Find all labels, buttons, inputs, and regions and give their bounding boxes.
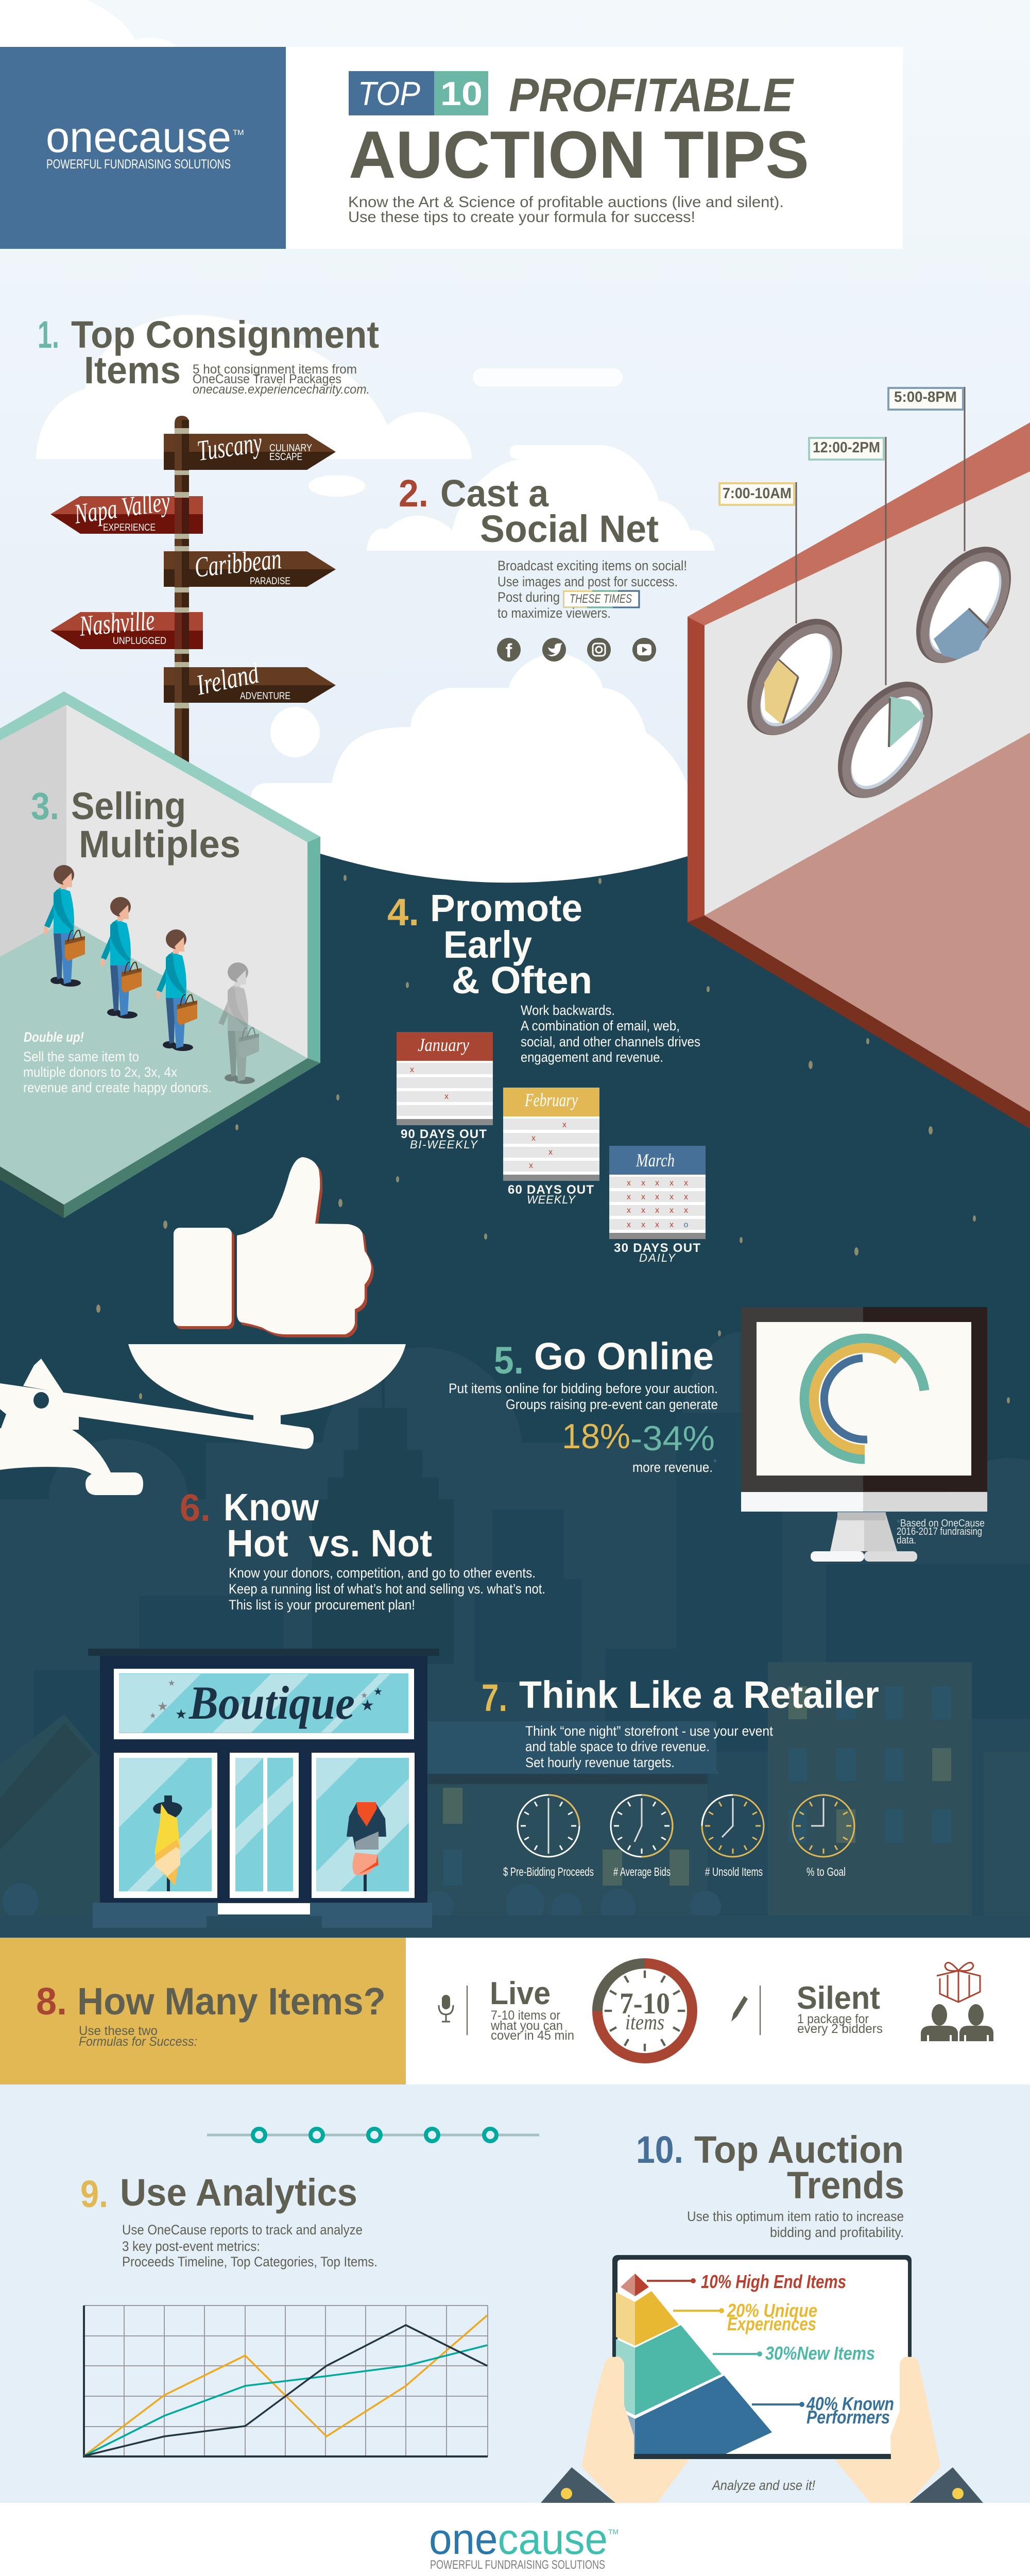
- calendar: february: 60 DAYS OUT: [508, 1183, 594, 1197]
- header panel: title: Know the Art & Science of profitable auctions (live and silent).: [348, 194, 784, 211]
- heading 4: promote early and often: Early: [443, 923, 532, 966]
- heading 5: go online: 5.: [494, 1339, 524, 1382]
- signpost: PARADISE: [250, 576, 290, 587]
- text block: one night storefront: and table space to drive revenue.: [525, 1739, 710, 1754]
- text block: silent: Silent: [797, 1980, 880, 2016]
- text block: silent: 1 package for: [797, 2012, 869, 2026]
- clouds: [0, 0, 715, 907]
- time label: 5-8pm with clock: 5:00-8PM: [894, 389, 957, 405]
- tablet with pyramid chart: 30%New Items: [765, 2343, 875, 2364]
- calendar: january: x: [410, 1065, 414, 1074]
- calendar: march: DAILY: [639, 1251, 676, 1264]
- panel: how many items heading: Use these two: [79, 2024, 158, 2038]
- calendar: january: [397, 1032, 493, 1151]
- text block: go online stat: *: [713, 1458, 717, 1468]
- icon: monitor with ring chart: [741, 1307, 987, 1562]
- illustration: boutique storefront: ★: [360, 1697, 374, 1714]
- text block: social tip: Use images and post for success.: [497, 574, 678, 589]
- icon: facebook: f: [506, 640, 512, 662]
- heading 9: use analytics: Use Analytics: [120, 2171, 357, 2214]
- text block: double up: multiple donors to 2x, 3x, 4x: [23, 1064, 177, 1080]
- text block: live: Live: [490, 1976, 551, 2011]
- text block: go online stat: 18%: [562, 1417, 630, 1456]
- footer: TM: [608, 2528, 619, 2536]
- text block: go online stat: -34%: [630, 1419, 715, 1458]
- heading 4: promote early and often: Promote: [430, 887, 582, 929]
- text block: social tip: Post during: [497, 589, 560, 605]
- heading 3: selling multiples: Selling: [71, 785, 186, 827]
- heading 6: know hot vs not: Hot vs. Not: [227, 1522, 432, 1565]
- text block: silent: every 2 bidders: [797, 2022, 883, 2036]
- calendar: february: WEEKLY: [527, 1193, 576, 1206]
- clock: percent to goal: % to Goal: [806, 1865, 846, 1878]
- text block: use analytics: Use OneCause reports to track and analyze: [122, 2222, 363, 2238]
- panel: how many items formulas: [406, 1938, 1030, 2084]
- heading 6: know hot vs not: 6.: [180, 1486, 211, 1529]
- text block: go online stat: more revenue.: [632, 1460, 713, 1475]
- icon: pen: [731, 1996, 748, 2022]
- text block: live: cover in 45 min: [491, 2028, 574, 2043]
- calendar: february: x: [529, 1161, 533, 1170]
- text block: use analytics: Proceeds Timeline, Top Categories, Top Items.: [122, 2254, 377, 2269]
- calendar: march: [609, 1146, 706, 1264]
- heading 7: think like a retailer: 7.: [482, 1676, 507, 1719]
- text block: use analytics: 3 key post-event metrics:: [122, 2239, 260, 2254]
- icon: microphone: [439, 1995, 453, 2022]
- heading 1: top consignment items: 1.: [38, 313, 59, 356]
- text block: live: what you can: [490, 2019, 563, 2033]
- clock: percent to goal: [793, 1795, 854, 1878]
- signpost: EXPERIENCE: [103, 522, 156, 533]
- text block: work backwards: engagement and revenue.: [521, 1049, 663, 1065]
- text block: know your donors: Know your donors, competition, and go to other events.: [229, 1565, 536, 1581]
- illustration: boutique storefront: ★: [149, 1711, 156, 1720]
- icon: youtube: [632, 638, 656, 662]
- panel: selling multiples room: [0, 691, 320, 1218]
- decorative stars: [96, 875, 1010, 1403]
- text block: live: [490, 1976, 574, 2043]
- calendar: march: x: [641, 1221, 645, 1229]
- calendar: january: 90 DAYS OUT: [401, 1127, 487, 1141]
- time label: 7-10am with clock: 7:00-10AM: [723, 485, 792, 502]
- lower panel background: [0, 2084, 1030, 2503]
- clock: 7-10 items: items: [625, 2011, 664, 2035]
- illustration: boutique storefront: ★: [157, 1700, 168, 1714]
- header panel: title: [286, 47, 903, 249]
- text block: know your donors: Keep a running list of what’s hot and selling vs. what’s not.: [229, 1581, 545, 1597]
- icon: hands holding tablet: [541, 2357, 983, 2503]
- tablet with pyramid chart: 40% Known: [806, 2393, 894, 2414]
- icon: two bidders: [921, 2004, 993, 2041]
- signpost: Caribbean: [193, 543, 283, 584]
- time label: 12-2pm with clock: [809, 437, 952, 815]
- text block: go online stat: [449, 1381, 718, 1475]
- heading 6: know hot vs not: [180, 1486, 432, 1565]
- timeline decoration: [207, 2129, 539, 2141]
- header panel: title: AUCTION TIPS: [349, 117, 809, 192]
- header panel: title: PROFITABLE: [509, 69, 794, 122]
- heading 1: top consignment items: OneCause Travel Packages: [193, 372, 341, 386]
- calendar: march: x: [655, 1206, 659, 1215]
- panel: how many items heading: [0, 1938, 406, 2084]
- calendar: january: January: [418, 1035, 469, 1055]
- text block: use analytics: [122, 2222, 377, 2269]
- clock: unsold items: [702, 1795, 764, 1878]
- text block: work backwards: [521, 1003, 700, 1065]
- heading 10: top auction trends: Top Auction: [694, 2128, 904, 2171]
- footnote: data.: [897, 1535, 916, 1546]
- heading 2: cast a social net: [399, 472, 659, 550]
- heading 2: cast a social net: Social Net: [480, 507, 659, 550]
- heading 10: top auction trends: 10.: [636, 2128, 683, 2171]
- text block: one night storefront: Think “one night” storefront - use your event: [525, 1723, 773, 1739]
- navy night background: [0, 854, 1030, 1938]
- icon: thumbs up: [174, 1157, 374, 1337]
- text block: know your donors: This list is your procurement plan!: [229, 1597, 415, 1613]
- time label: 12-2pm with clock: 12:00-2PM: [813, 439, 880, 456]
- panel: clock wall building: [688, 422, 1030, 1129]
- calendar: march: x: [670, 1179, 674, 1188]
- signpost: Ireland: [193, 657, 262, 702]
- text block: live: 7-10 items or: [491, 2008, 560, 2023]
- calendar: march: x: [684, 1206, 688, 1215]
- text block: social tip: THESE TIMES: [570, 592, 632, 606]
- icon: instagram: [587, 638, 611, 662]
- footer: POWERFUL FUNDRAISING SOLUTIONS: [430, 2558, 605, 2572]
- calendar: february: x: [531, 1134, 536, 1143]
- heading 2: cast a social net: Cast a: [440, 472, 549, 515]
- footer: [0, 2503, 1030, 2576]
- heading 4: promote early and often: [387, 887, 592, 1002]
- signpost: Napa Valley: [72, 485, 172, 530]
- icon: gift: [937, 1962, 980, 2002]
- text block: double up: Double up!: [24, 1029, 84, 1045]
- clock: unsold items: # Unsold Items: [705, 1865, 763, 1878]
- clock: average bids: [611, 1795, 673, 1878]
- calendar: march: x: [627, 1179, 631, 1188]
- text block: silent: [797, 1980, 883, 2036]
- calendar: march: x: [641, 1206, 645, 1215]
- header panel: logo: [0, 47, 286, 249]
- clock: average bids: # Average Bids: [613, 1865, 671, 1878]
- heading 6: know hot vs not: Know: [224, 1486, 319, 1529]
- illustration: donors in line: [44, 865, 259, 1084]
- caption: analyze and use it: Analyze and use it!: [711, 2478, 815, 2493]
- calendar: march: x: [655, 1179, 659, 1188]
- text block: double up: Sell the same item to: [23, 1049, 139, 1064]
- text block: work backwards: A combination of email, web,: [521, 1018, 680, 1033]
- footnote: 2016-2017 fundraising: [897, 1526, 982, 1537]
- calendar: february: February: [524, 1090, 578, 1110]
- clock: pre-bidding proceeds: [503, 1795, 594, 1878]
- heading 5: go online: Go Online: [534, 1335, 714, 1378]
- calendar: march: x: [627, 1206, 631, 1215]
- calendar: january: BI-WEEKLY: [410, 1138, 478, 1151]
- text block: one night storefront: [525, 1723, 773, 1770]
- calendar: march: x: [655, 1221, 659, 1229]
- calendar: march: 30 DAYS OUT: [614, 1241, 700, 1255]
- clock: 7-10 items: 7-10: [620, 1987, 670, 2020]
- header panel: logo: POWERFUL FUNDRAISING SOLUTIONS: [46, 157, 231, 172]
- header panel: logo: TM: [233, 128, 244, 137]
- signpost: [50, 416, 336, 762]
- text block: social tip: to maximize viewers.: [497, 605, 611, 621]
- heading 1: top consignment items: [38, 313, 379, 397]
- illustration: boutique storefront: Boutique: [188, 1676, 355, 1729]
- heading 9: use analytics: 9.: [80, 2173, 108, 2215]
- text block: social tip: [497, 558, 687, 621]
- calendar: march: March: [636, 1150, 675, 1171]
- calendar: january: x: [444, 1092, 449, 1101]
- text block: double up: [23, 1029, 212, 1095]
- text block: work backwards: social, and other channels drives: [521, 1034, 700, 1049]
- calendar: march: x: [627, 1221, 631, 1229]
- signpost: Tuscany: [195, 427, 264, 467]
- text block: social tip: Broadcast exciting items on social!: [497, 558, 687, 573]
- illustration: boutique storefront: ★: [168, 1679, 175, 1688]
- header panel: title: 10: [440, 75, 483, 112]
- illustration: boutique storefront: ★: [175, 1706, 187, 1722]
- tablet with pyramid chart: 20% Unique: [727, 2300, 817, 2321]
- calendar: february: x: [562, 1121, 566, 1129]
- tablet with pyramid chart: Experiences: [727, 2313, 816, 2334]
- calendar: february: x: [548, 1148, 553, 1157]
- heading 4: promote early and often: & Often: [452, 959, 592, 1002]
- footer: onecause: [429, 2515, 608, 2563]
- text block: know your donors: [229, 1565, 545, 1613]
- calendar: march: x: [670, 1193, 674, 1201]
- calendar: march: x: [684, 1179, 688, 1188]
- panel: how many items heading: Formulas for Success:: [79, 2035, 197, 2049]
- text block: auction trends: Use this optimum item ratio to increase: [687, 2209, 904, 2224]
- clock: pre-bidding proceeds: $ Pre-Bidding Proceeds: [503, 1865, 594, 1878]
- line chart: [84, 2306, 488, 2456]
- signpost: UNPLUGGED: [113, 636, 166, 647]
- illustration: boutique storefront: [88, 1649, 439, 1928]
- illustration: boutique storefront: ★: [360, 1691, 368, 1700]
- tablet with pyramid chart: [612, 2255, 912, 2459]
- heading 1: top consignment items: Top Consignment: [71, 313, 379, 356]
- time label: 5-8pm with clock: [888, 387, 1030, 680]
- sky background: [0, 0, 1030, 907]
- calendar: march: x: [684, 1193, 688, 1201]
- icon: facebook: [497, 638, 521, 662]
- heading 3: selling multiples: Multiples: [79, 823, 241, 866]
- text block: go online stat: Groups raising pre-event can generate: [506, 1397, 718, 1412]
- text block: go online stat: Put items online for bidding before your auction.: [449, 1381, 718, 1396]
- signpost: ADVENTURE: [240, 691, 290, 702]
- heading 7: think like a retailer: Think Like a Retailer: [519, 1673, 879, 1716]
- heading 1: top consignment items: onecause.experiencecharity.com.: [193, 382, 370, 397]
- calendar: march: o: [684, 1221, 689, 1229]
- signpost: CULINARY: [269, 443, 312, 454]
- heading 2: cast a social net: 2.: [399, 472, 428, 515]
- tablet with pyramid chart: Performers: [806, 2406, 890, 2428]
- calendar: march: x: [670, 1206, 674, 1215]
- text block: work backwards: Work backwards.: [521, 1003, 615, 1018]
- heading 10: top auction trends: [636, 2128, 904, 2207]
- calendar: march: x: [641, 1179, 645, 1188]
- signpost: Nashville: [78, 604, 156, 642]
- header panel: title: Use these tips to create your formula for success!: [348, 209, 695, 226]
- clock: 7-10 items: [597, 1963, 692, 2058]
- city skyline: [0, 1328, 1030, 1938]
- panel: how many items heading: 8.: [36, 1980, 67, 2023]
- signpost: ESCAPE: [269, 451, 302, 463]
- text block: auction trends: bidding and profitability.: [770, 2225, 904, 2240]
- calendar: march: x: [655, 1193, 659, 1201]
- heading 10: top auction trends: Trends: [787, 2164, 904, 2207]
- heading 1: top consignment items: 5 hot consignment items from: [193, 362, 357, 377]
- calendar: february: [503, 1088, 599, 1206]
- heading 3: selling multiples: 3.: [31, 785, 59, 827]
- footnote: [897, 1518, 985, 1546]
- illustration: boutique storefront: ★: [373, 1686, 383, 1698]
- heading 4: promote early and often: 4.: [387, 891, 419, 934]
- panel: how many items heading: How Many Items?: [77, 1980, 386, 2023]
- text block: one night storefront: Set hourly revenue targets.: [525, 1755, 675, 1770]
- footnote: *Based on OneCause: [897, 1518, 985, 1529]
- calendar: march: x: [627, 1193, 631, 1201]
- text block: double up: revenue and create happy donors.: [23, 1080, 212, 1095]
- time label: 7-10am with clock: [719, 482, 862, 752]
- calendar: march: x: [641, 1193, 645, 1201]
- icon: twitter: [542, 638, 566, 662]
- heading 3: selling multiples: [31, 785, 241, 866]
- tablet with pyramid chart: 10% High End Items: [701, 2271, 846, 2292]
- calendar: march: x: [670, 1221, 674, 1229]
- icon: balance scale: [0, 1344, 406, 1495]
- header panel: logo: onecause: [46, 113, 231, 161]
- header panel: title: TOP: [358, 75, 420, 112]
- heading 1: top consignment items: Items: [84, 349, 181, 392]
- text block: auction trends: [687, 2209, 904, 2240]
